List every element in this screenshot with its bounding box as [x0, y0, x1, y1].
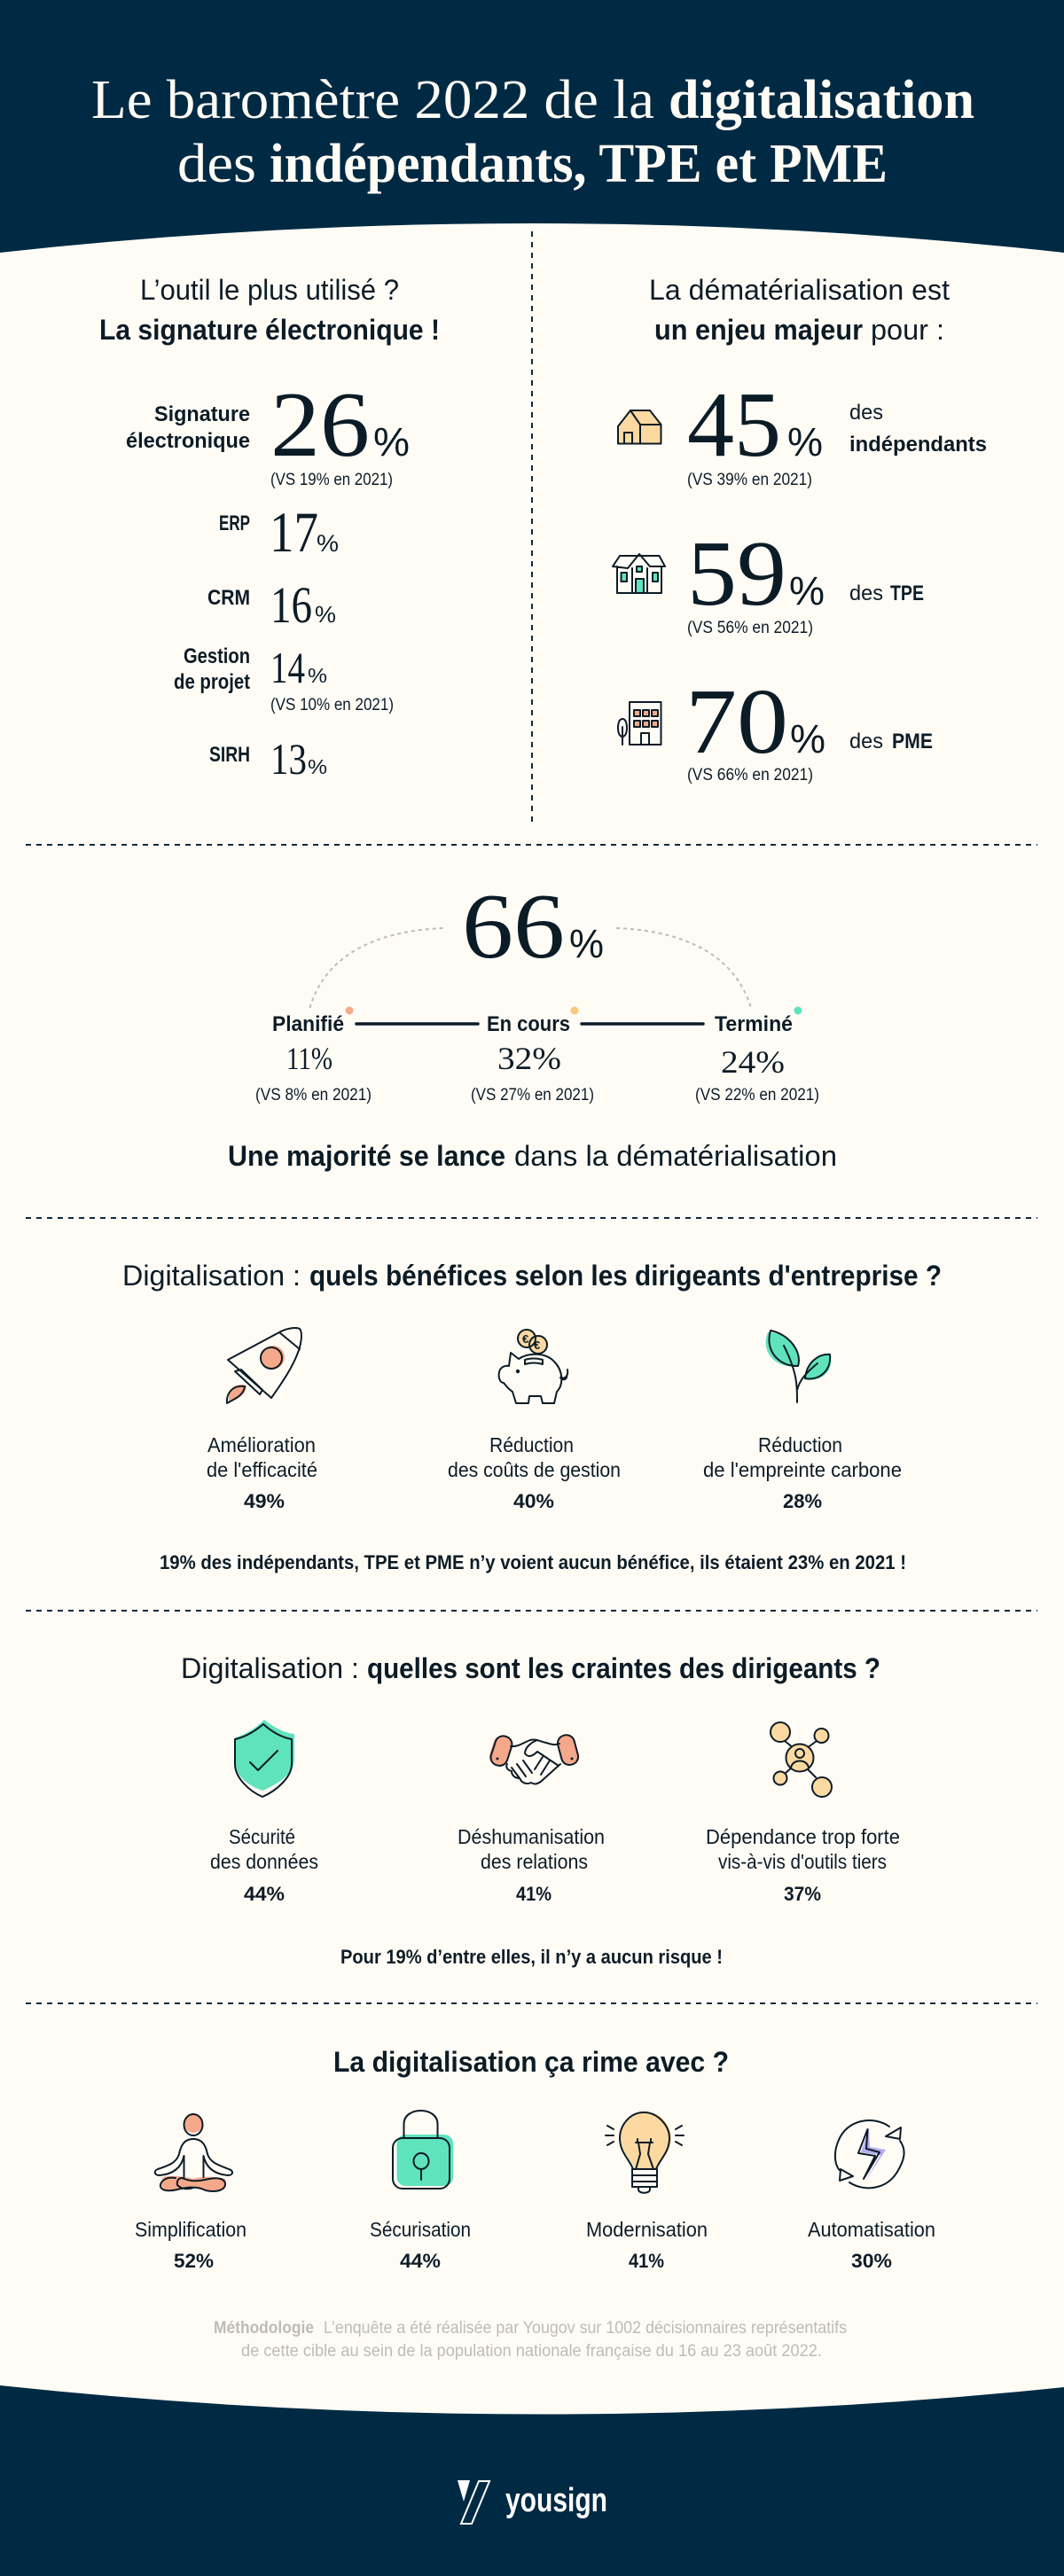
connector lines [356, 1022, 703, 1026]
word: simplification: 52% [174, 2250, 214, 2272]
stat: TPE: des [849, 582, 883, 605]
status dots [346, 1007, 802, 1014]
panel: rhymes with [135, 2046, 935, 2272]
fear: dehumanisation [458, 1825, 605, 1905]
caption: dans la dématérialisation [514, 1140, 837, 1172]
caption: Une majorité se lance [228, 1140, 505, 1172]
stat: PME: % [790, 716, 825, 761]
stat: PME: PME [892, 730, 933, 753]
word: securing: 44% [400, 2250, 441, 2272]
icon: piggy bank: € [534, 1339, 540, 1352]
stat: PME: 70 [685, 669, 788, 773]
stat: TPE [687, 521, 924, 637]
benefit: carbon footprint [703, 1433, 902, 1512]
stat: independents: % [787, 419, 823, 464]
icon: piggy bank [499, 1330, 567, 1403]
icon: office building [618, 702, 661, 745]
icon: padlock [393, 2111, 453, 2189]
heading: major issue: un enjeu majeur [654, 314, 863, 346]
stat: independents: indépendants [849, 433, 987, 457]
fear: data security [210, 1825, 318, 1905]
stat: PME: des [849, 730, 883, 753]
step: in progress: (VS 27% en 2021) [471, 1086, 594, 1105]
benefit: efficiency: Amélioration [207, 1433, 316, 1456]
stat: signature [126, 372, 410, 489]
heading: fears: Digitalisation : [181, 1652, 359, 1684]
stat: CRM: % [315, 601, 336, 628]
stat: SIRH: % [308, 755, 327, 778]
stat: TPE: (VS 56% en 2021) [687, 619, 813, 637]
heading: benefits: quels bénéfices selon les dirigeants d'entreprise ? [309, 1260, 942, 1292]
logo: yousign [458, 2480, 607, 2524]
caption [228, 1140, 837, 1172]
stat: SIRH [209, 734, 327, 784]
fear: dehumanisation: Déshumanisation [458, 1825, 605, 1848]
stat: ERP: % [317, 530, 339, 557]
benefit: efficiency [207, 1433, 317, 1512]
stat: project management: 14 [270, 643, 305, 692]
title: des [177, 134, 256, 194]
word: automation [808, 2218, 935, 2272]
fear: dependency: Dépendance trop forte [706, 1825, 900, 1848]
big number 66%: % [569, 921, 604, 966]
icon: shield [235, 1720, 294, 1797]
fear: dehumanisation: des relations [481, 1850, 588, 1873]
fear: data security: Sécurité [229, 1825, 295, 1848]
word: simplification [135, 2218, 246, 2272]
icon: handshake [487, 1733, 581, 1784]
note: no benefit: 19% des indépendants, TPE et PME n’y voient aucun bénéfice, ils étaient 23% en 2021 ! [160, 1551, 906, 1573]
step: done: Terminé [715, 1012, 793, 1036]
stat: ERP: 17 [270, 501, 318, 565]
stat: CRM [207, 576, 336, 634]
fear: dependency: 37% [784, 1883, 821, 1905]
stat: signature: (VS 19% en 2021) [270, 471, 393, 489]
stat: ERP: ERP [219, 511, 250, 535]
title: Le baromètre 2022 de la [91, 70, 654, 130]
icon: plant [766, 1331, 831, 1402]
step: in progress [471, 1012, 594, 1105]
big number 66%: 66 [462, 874, 565, 978]
word: modernisation: 41% [629, 2250, 664, 2272]
methodology text: Méthodologie [214, 2319, 314, 2338]
word: modernisation [586, 2218, 708, 2272]
stat: PME [685, 669, 933, 785]
stat: project management: de projet [174, 670, 250, 694]
heading: rhymes with: La digitalisation ça rime avec ? [333, 2046, 729, 2078]
big number 66% [462, 874, 604, 978]
benefit: carbon footprint: Réduction [758, 1433, 842, 1456]
fear: dependency: vis-à-vis d'outils tiers [718, 1850, 887, 1873]
word: automation: Automatisation [808, 2218, 935, 2241]
heading: most used tool: L’outil le plus utilisé ? [140, 274, 399, 306]
heading: fears: quelles sont les craintes des dirigeants ? [367, 1652, 880, 1684]
fear: data security: des données [210, 1850, 318, 1873]
stat: CRM: CRM [207, 586, 250, 610]
logo: yousign: yousign [505, 2482, 607, 2519]
benefit: costs: 40% [513, 1490, 554, 1512]
stat: project management: % [308, 664, 327, 687]
icon: rocket [227, 1328, 301, 1403]
panel: progress of dematerialisation [228, 874, 837, 1172]
benefit: carbon footprint: 28% [783, 1490, 822, 1512]
methodology text: L’enquête a été réalisée par Yougov sur 1002 décisionnaires représentatifs [324, 2319, 847, 2338]
stat: signature: électronique [126, 429, 250, 453]
fear: data security: 44% [244, 1883, 285, 1905]
icon: medium house [613, 554, 665, 593]
fear: dependency [706, 1825, 900, 1905]
heading: major issue: La dématérialisation est [649, 274, 950, 306]
stat: signature: % [373, 419, 410, 464]
step: in progress: En cours [487, 1012, 570, 1036]
step: in progress: 32% [497, 1041, 561, 1076]
panel: benefits [122, 1260, 942, 1573]
step: planned: 11% [286, 1041, 332, 1076]
title [91, 70, 974, 194]
stat: signature: 26 [270, 372, 370, 476]
heading: fears [181, 1652, 880, 1684]
word: securing [370, 2218, 471, 2272]
benefit: costs [448, 1433, 621, 1512]
dotted arcs [310, 928, 751, 1008]
step: planned: (VS 8% en 2021) [255, 1086, 372, 1105]
benefit: carbon footprint: de l'empreinte carbone [703, 1458, 902, 1481]
panel: major issue [613, 274, 987, 785]
icon: light bulb [606, 2112, 684, 2193]
heading: most used tool [99, 274, 440, 346]
panel: fears [181, 1652, 900, 1968]
stat: independents [687, 372, 987, 489]
benefit: costs: Réduction [489, 1433, 574, 1456]
stat: signature: Signature [154, 402, 250, 426]
heading: major issue [649, 274, 950, 346]
stat: project management: (VS 10% en 2021) [270, 696, 394, 714]
benefit: costs: des coûts de gestion [448, 1458, 621, 1481]
word: securing: Sécurisation [370, 2218, 471, 2241]
benefit: efficiency: 49% [244, 1490, 285, 1512]
title: indépendants, TPE et PME [270, 134, 888, 194]
stat: PME: (VS 66% en 2021) [687, 766, 813, 785]
word: simplification: Simplification [135, 2218, 246, 2241]
heading: most used tool: La signature électronique ! [99, 314, 440, 346]
fear: dehumanisation: 41% [516, 1883, 552, 1905]
step: planned [255, 1012, 372, 1105]
icon: network [771, 1722, 832, 1797]
title: digitalisation [669, 70, 974, 130]
word: modernisation: Modernisation [586, 2218, 708, 2241]
heading: benefits: Digitalisation : [122, 1260, 301, 1292]
stat: TPE: 59 [687, 521, 786, 625]
stat: TPE: % [789, 568, 825, 613]
icon: automation [835, 2120, 904, 2188]
benefit: efficiency: de l'efficacité [207, 1458, 317, 1481]
stat: project management [174, 643, 394, 714]
panel: most used tool [99, 274, 440, 784]
step: done [695, 1012, 819, 1105]
stat: TPE: TPE [890, 582, 924, 605]
stat: SIRH: 13 [270, 734, 307, 784]
stat: independents: 45 [687, 372, 781, 476]
methodology text [214, 2319, 847, 2361]
step: done: (VS 22% en 2021) [695, 1086, 819, 1105]
heading: major issue: pour : [871, 314, 944, 346]
word: automation: 30% [851, 2250, 892, 2272]
note: no risk: Pour 19% d’entre elles, il n’y a aucun risque ! [340, 1946, 723, 1968]
stat: SIRH: SIRH [209, 743, 250, 767]
stat: independents: (VS 39% en 2021) [687, 471, 812, 489]
step: planned: Planifié [272, 1012, 344, 1036]
stat: project management: Gestion [184, 644, 250, 668]
stat: independents: des [849, 401, 883, 425]
stat: CRM: 16 [270, 576, 312, 634]
stat: ERP [219, 501, 339, 565]
icon: small house [618, 410, 661, 444]
icon: piggy bank: € [522, 1332, 528, 1346]
methodology text: de cette cible au sein de la population nationale française du 16 au 23 août 2022. [241, 2342, 822, 2361]
step: done: 24% [721, 1044, 785, 1080]
icon: meditation [155, 2113, 232, 2191]
